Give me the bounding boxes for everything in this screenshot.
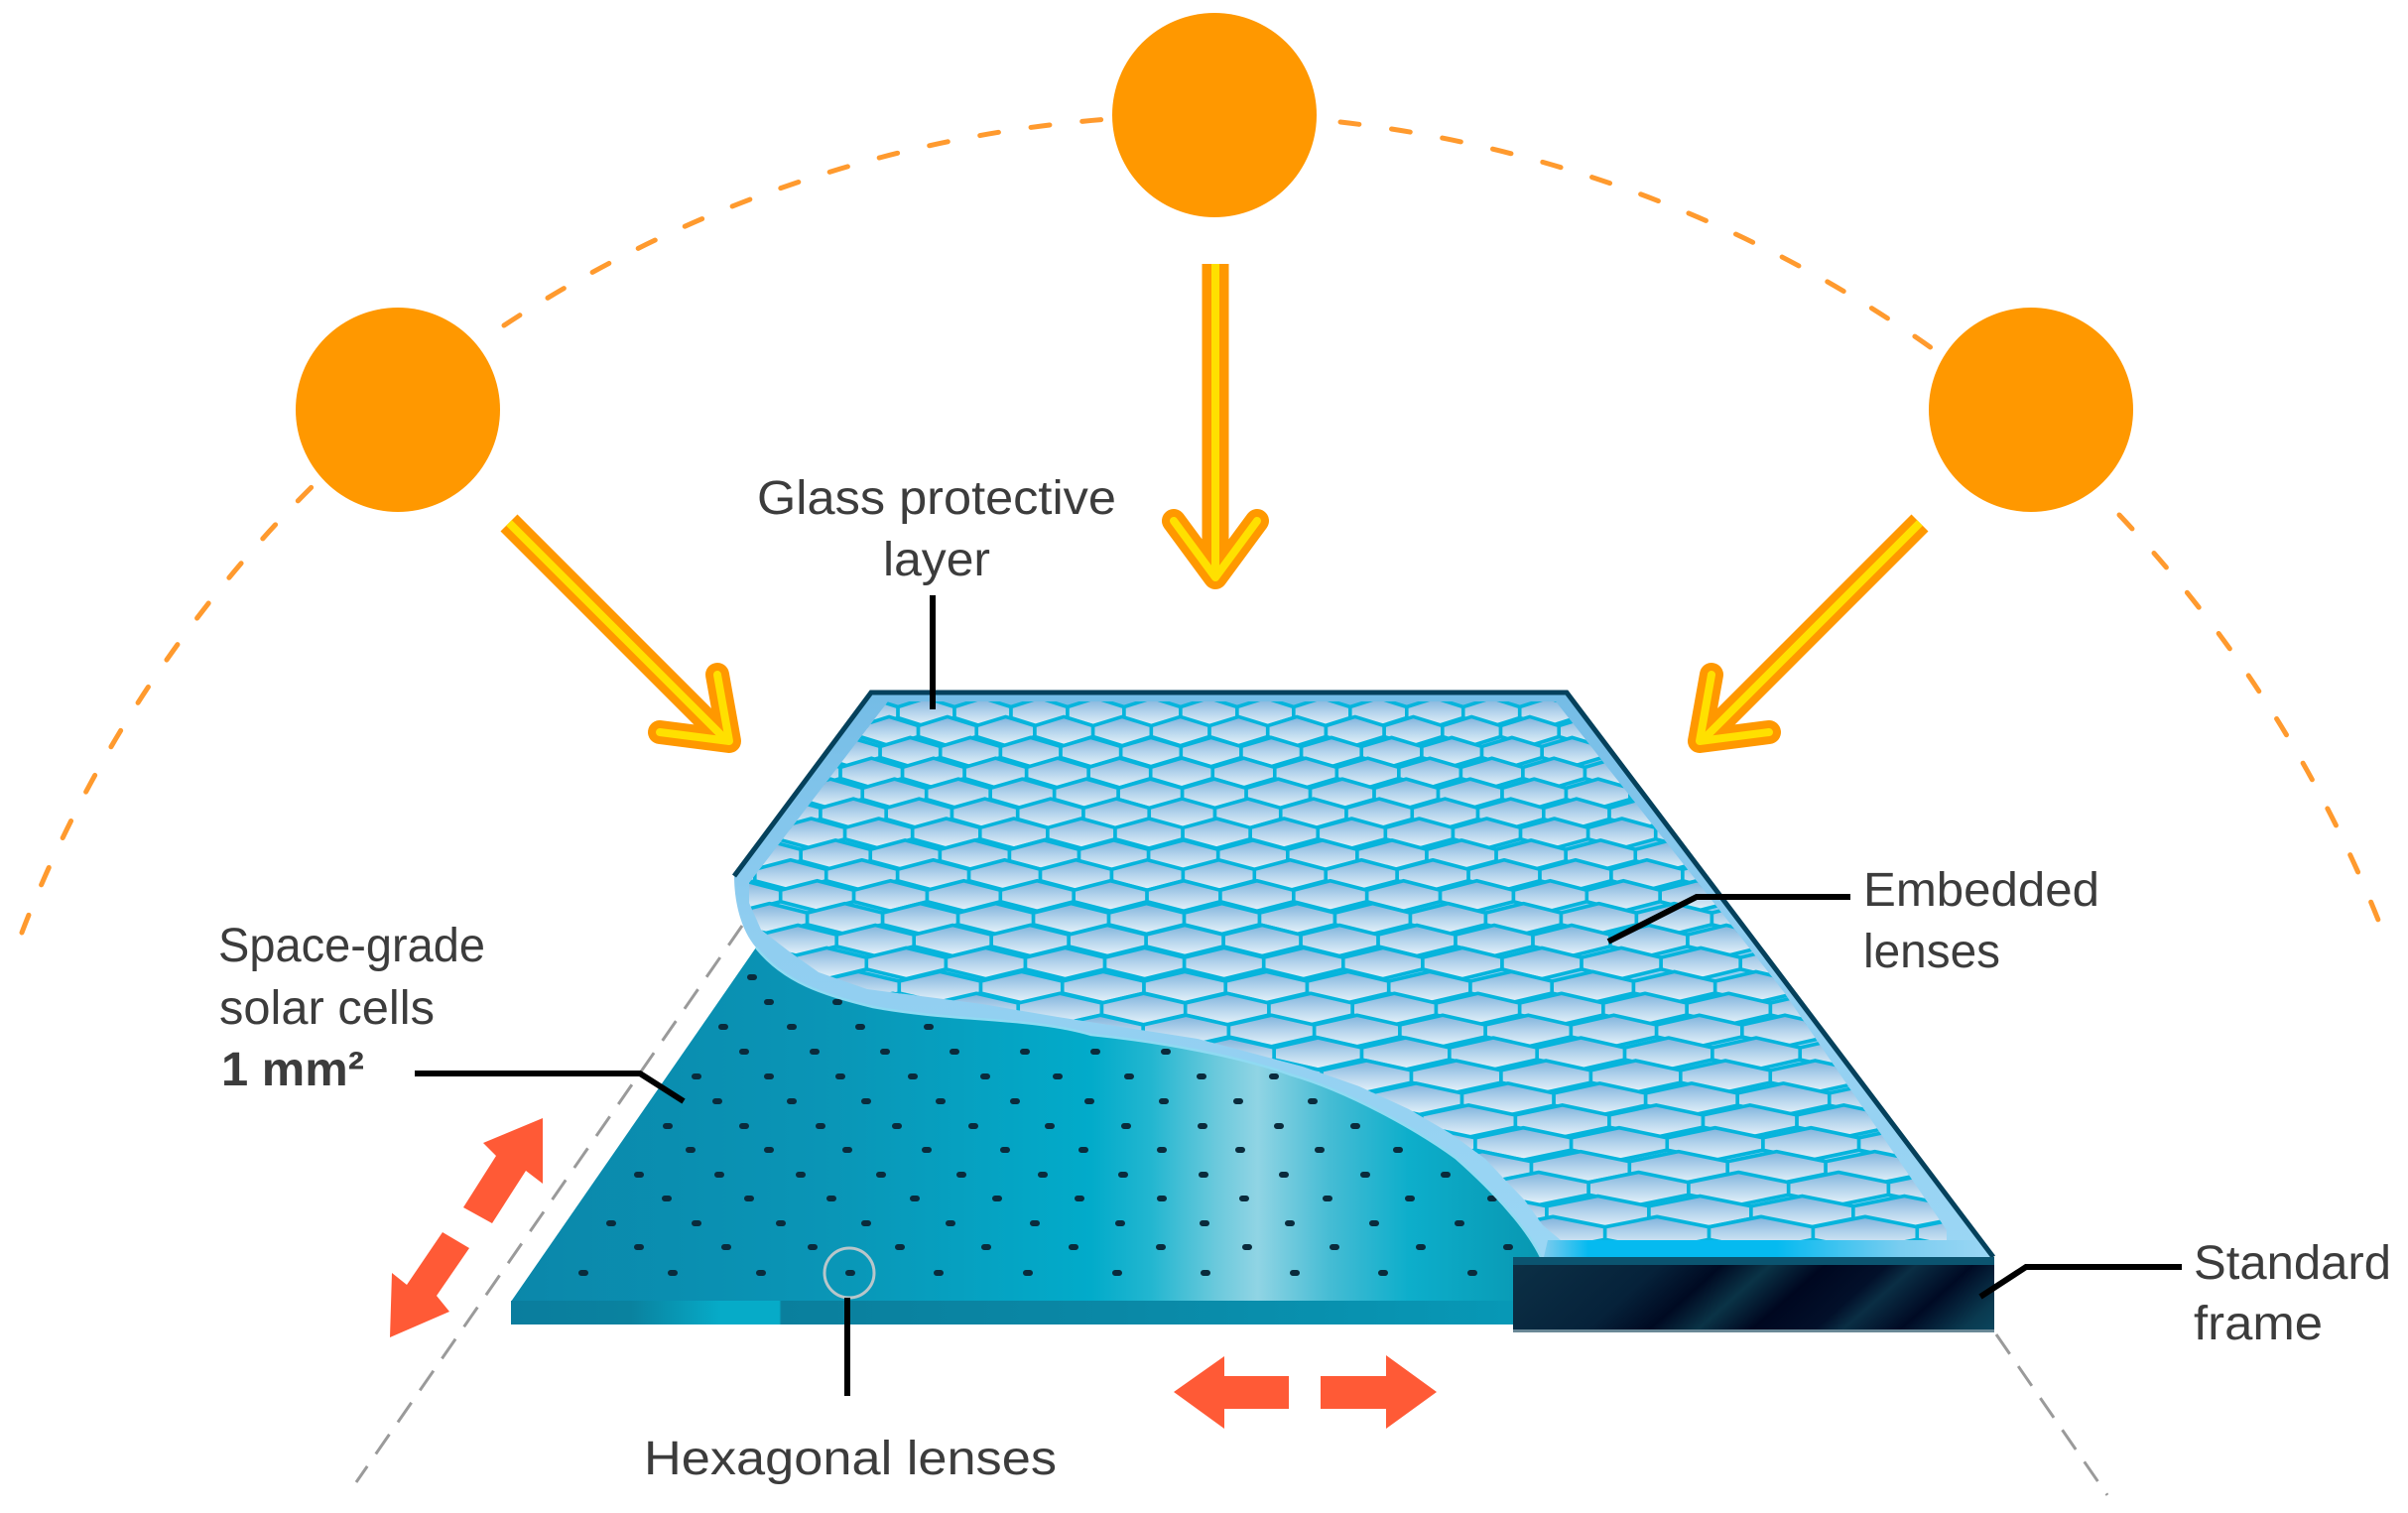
callout: standard frame: Standard bbox=[2194, 1237, 2391, 1290]
glass bottom glow bbox=[1544, 1240, 1990, 1257]
embedded hexagonal lens grid bbox=[749, 701, 1947, 1240]
callout: hexagonal lenses: Hexagonal lenses bbox=[644, 1433, 1057, 1485]
solar cell layer surface bbox=[511, 943, 1587, 1302]
sun: right bbox=[1929, 308, 2133, 512]
callout: space-grade solar cells: solar cells bbox=[219, 982, 435, 1035]
perspective guide lines bbox=[356, 926, 2107, 1495]
sun path dashed arc bbox=[22, 119, 2383, 933]
callout: glass protective layer bbox=[757, 472, 1116, 709]
callout: space-grade solar cells bbox=[218, 920, 684, 1101]
callout: embedded lenses: lenses bbox=[1863, 926, 2000, 978]
solar cell dots bbox=[581, 977, 1510, 1273]
callout: space-grade solar cells: Space-grade bbox=[218, 920, 485, 972]
arrow: right sun ray bbox=[1700, 523, 1920, 741]
callout: glass protective layer: layer bbox=[883, 534, 990, 586]
double arrow: horizontal expansion bbox=[1174, 1355, 1437, 1429]
panel: solar module bbox=[511, 691, 1995, 1332]
glass protective layer bbox=[734, 693, 1993, 1257]
callout: standard frame bbox=[1980, 1237, 2391, 1350]
glass curl highlight edge bbox=[756, 947, 1541, 1257]
sun: left bbox=[296, 308, 500, 512]
callout: standard frame: frame bbox=[2194, 1298, 2323, 1350]
double arrow: diagonal expansion bbox=[390, 1118, 543, 1337]
callout: embedded lenses bbox=[1608, 864, 2099, 978]
callout: embedded lenses: Embedded bbox=[1863, 864, 2099, 917]
glass dark outer edge bbox=[734, 693, 1993, 1257]
callout: hexagonal lenses bbox=[644, 1248, 1057, 1485]
solar cell layer front edge bbox=[511, 1301, 1513, 1324]
arrow: left sun ray bbox=[509, 523, 729, 741]
arrow: centre sun ray bbox=[1174, 264, 1257, 577]
sun: top centre bbox=[1112, 13, 1317, 217]
callout: glass protective layer: Glass protective bbox=[757, 472, 1116, 525]
standard frame bbox=[1513, 1257, 1994, 1332]
callout: space-grade solar cells: 1 mm² bbox=[221, 1044, 364, 1096]
